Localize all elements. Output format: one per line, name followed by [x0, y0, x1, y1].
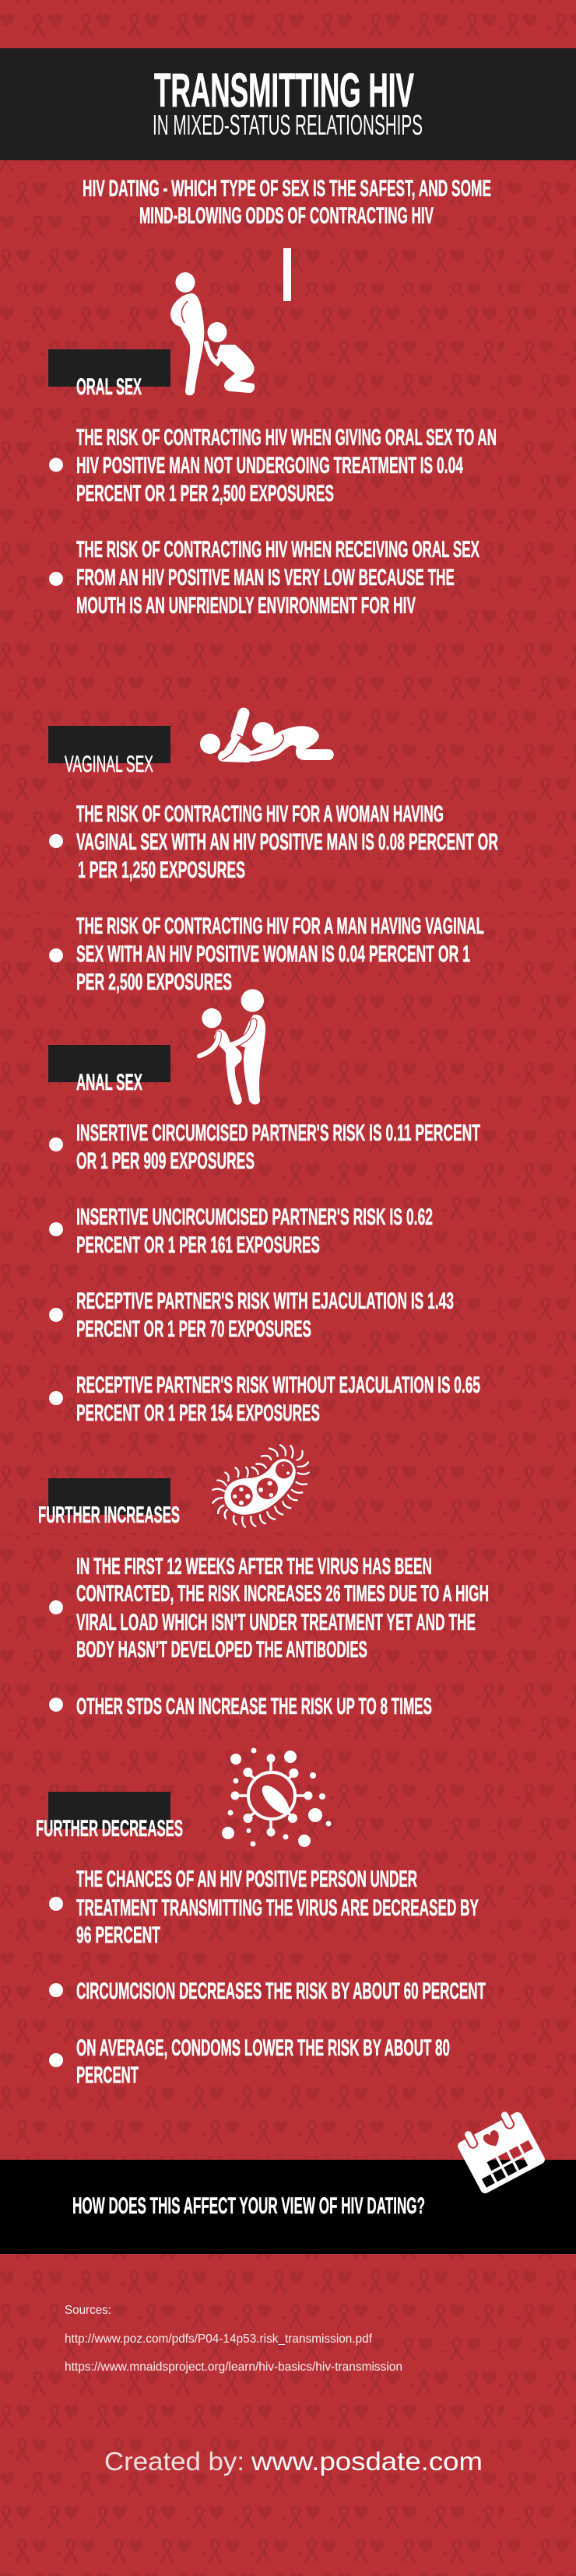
bullet: first 12 weeks: BODY HASN’T DEVELOPED THE ANTIBODIES	[76, 1637, 367, 1663]
icon: oral sex figures	[170, 272, 255, 395]
bullet: receptive without ejaculation: PERCENT OR 1 PER 154 EXPOSURES	[76, 1400, 320, 1426]
icon: bacteria	[212, 1445, 309, 1527]
bullet: condoms	[49, 2035, 450, 2088]
label box: anal sex: ANAL SEX	[76, 1070, 142, 1095]
sources	[65, 2304, 402, 2374]
bullet: receptive without ejaculation	[49, 1372, 480, 1426]
label box: vaginal sex: VAGINAL SEX	[65, 752, 153, 777]
sources: http://www.poz.com/pdfs/P04-14p53.risk_transmission.pdf	[65, 2332, 373, 2346]
icon: virus	[222, 1747, 332, 1847]
bullet: insertive uncircumcised	[49, 1204, 433, 1258]
bullet: receptive with ejaculation: PERCENT OR 1 PER 70 EXPOSURES	[76, 1316, 311, 1342]
bullet: man risk: PER 2,500 EXPOSURES	[76, 969, 232, 995]
section: further decreases	[36, 1747, 486, 2088]
credit line: Created by:	[104, 2447, 244, 2476]
section: further increases	[38, 1445, 489, 1719]
bullet: treatment	[49, 1866, 479, 1948]
bullet: receptive with ejaculation	[49, 1288, 454, 1342]
icon: vaginal sex figures	[200, 713, 334, 762]
vertical divider bar	[283, 248, 291, 301]
bullet: woman risk: 1 PER 1,250 EXPOSURES	[78, 857, 245, 883]
bullet: insertive circumcised	[49, 1120, 480, 1174]
label box: further increases: FURTHER INCREASES	[38, 1502, 180, 1528]
credit line: www.posdate.com	[251, 2447, 483, 2476]
bullet: woman risk	[49, 801, 498, 883]
header banner	[0, 48, 576, 160]
section: vaginal sex	[48, 713, 498, 995]
bullet: insertive circumcised: OR 1 PER 909 EXPOSURES	[76, 1148, 255, 1174]
sources: Sources:	[65, 2304, 111, 2317]
intro text	[83, 176, 491, 229]
bullet: treatment: 96 PERCENT	[76, 1922, 160, 1948]
label box: oral sex	[48, 349, 170, 400]
section: anal sex	[48, 989, 480, 1426]
label box: further decreases: FURTHER DECREASES	[36, 1816, 183, 1842]
label box: further decreases	[36, 1792, 183, 1842]
bullet: giving oral sex	[49, 425, 497, 506]
section: oral sex	[48, 272, 497, 619]
icon: calendar	[458, 2112, 545, 2194]
label box: oral sex: ORAL SEX	[76, 374, 142, 400]
question banner	[0, 2160, 576, 2254]
bullet: man risk	[49, 913, 484, 995]
credit line	[104, 2447, 483, 2476]
label box: vaginal sex	[48, 726, 170, 777]
bullet: giving oral sex: PERCENT OR 1 PER 2,500 EXPOSURES	[76, 481, 334, 506]
label box: anal sex	[48, 1045, 170, 1095]
bullet: other STDs	[49, 1694, 432, 1719]
bullet: receiving oral sex	[49, 537, 479, 619]
icon: anal sex figures	[199, 989, 265, 1105]
label box: further increases	[38, 1478, 180, 1528]
sources: https://www.mnaidsproject.org/learn/hiv-basics/hiv-transmission	[65, 2360, 402, 2374]
bullet: first 12 weeks	[49, 1554, 489, 1663]
bullet: condoms: PERCENT	[76, 2063, 139, 2088]
bullet: insertive uncircumcised: PERCENT OR 1 PER 161 EXPOSURES	[76, 1232, 320, 1258]
